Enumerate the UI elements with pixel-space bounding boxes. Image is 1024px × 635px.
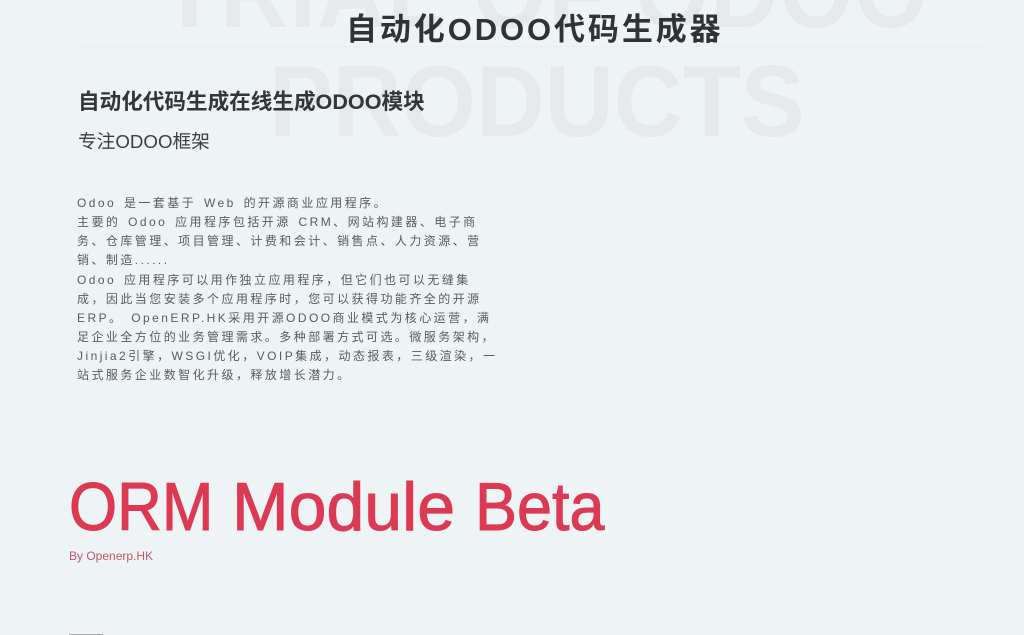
product name heading: Beta <box>475 469 605 545</box>
body text block: 站式服务企业数智化升级，释放增长潜力。 <box>77 368 352 382</box>
body text block: Odoo 应用程序可以用作独立应用程序，但它们也可以无缝集 <box>77 273 471 287</box>
product name heading: ORM <box>69 469 213 545</box>
body text block: 足企业全方位的业务管理需求。多种部署方式可选。微服务架构， <box>77 330 496 344</box>
body text block: Odoo 是一套基于 Web 的开源商业应用程序。 <box>77 196 388 210</box>
body text block: Jinjia2引擎，WSGI优化，VOIP集成，动态报表，三级渲染，一 <box>77 349 497 363</box>
body text block: 主要的 Odoo 应用程序包括开源 CRM、网站构建器、电子商 <box>77 215 478 229</box>
product name heading: Module <box>232 469 455 545</box>
divider under title <box>80 46 990 47</box>
watermark: background text <box>161 0 930 150</box>
body text block: ERP。 OpenERP.HK采用开源ODOO商业模式为核心运营，满 <box>77 311 491 325</box>
body text block: 务、仓库管理、项目管理、计费和会计、销售点、人力资源、营 <box>77 234 482 248</box>
tagline: 专注ODOO框架 <box>78 131 210 152</box>
bottom edge marker <box>69 634 103 635</box>
byline: By Openerp.HK <box>69 549 153 563</box>
product name heading <box>69 469 605 545</box>
body text block: 销、制造...... <box>77 253 170 267</box>
title: 自动化ODOO代码生成器 <box>346 12 724 47</box>
body text block <box>77 196 497 382</box>
subheading: 自动化代码生成在线生成ODOO模块 <box>78 89 425 114</box>
body text block: 成，因此当您安装多个应用程序时，您可以获得功能齐全的开源 <box>77 292 482 306</box>
